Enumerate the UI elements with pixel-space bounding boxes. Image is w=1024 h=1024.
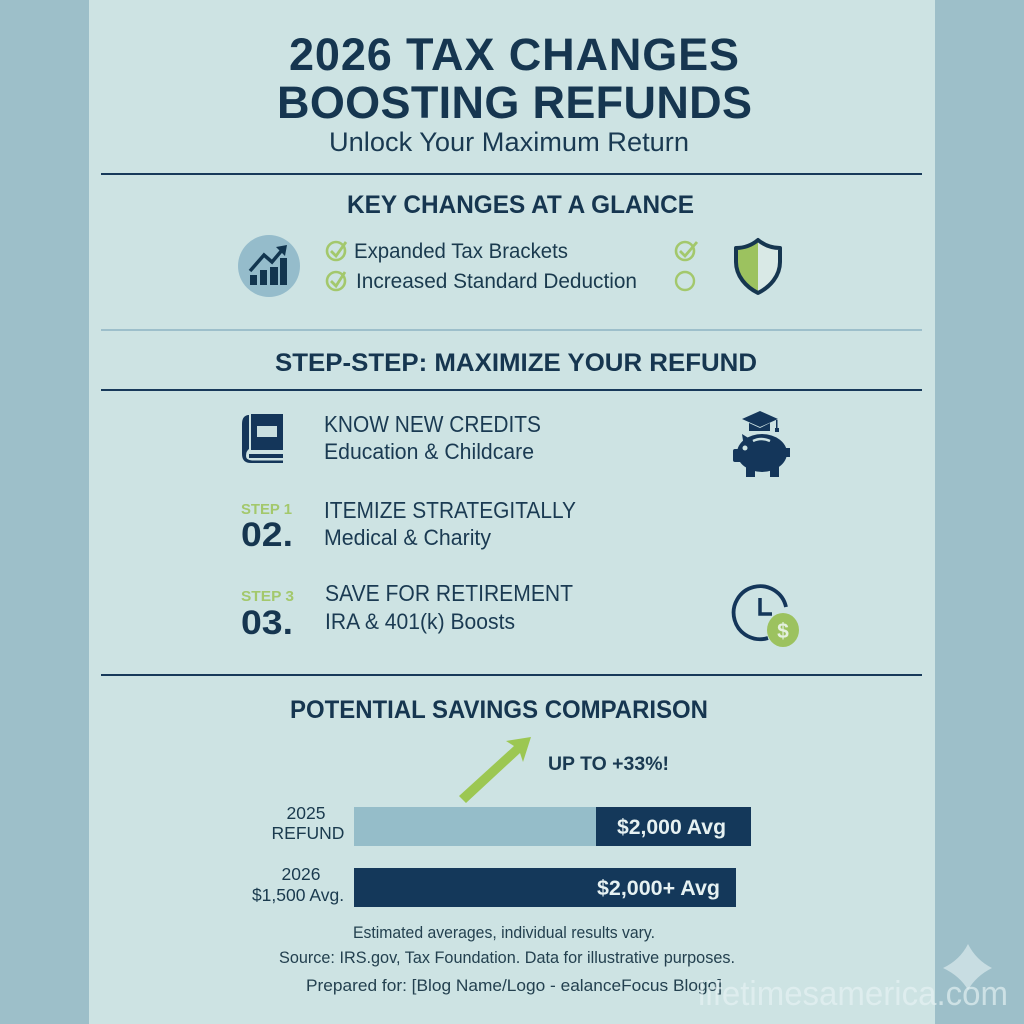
footnotes: Source: IRS.gov, Tax Foundation. Data for illustrative purposes.: [279, 948, 735, 967]
icon: piggy bank with cap: [733, 411, 790, 477]
label: 2025 refund: REFUND: [272, 823, 344, 843]
label: 2025 refund: 2025: [287, 803, 325, 823]
icon: check two: [327, 272, 345, 290]
bar: 2025: $2,000 Avg: [617, 816, 726, 839]
heading: step-step: STEP-STEP: MAXIMIZE YOUR REFUND: [275, 349, 757, 377]
text: expanded tax brackets: Expanded Tax Brackets: [354, 240, 568, 263]
text: increased standard deduction: Increased Standard Deduction: [356, 270, 637, 293]
text: itemize strategically: ITEMIZE STRATEGITALLY: [324, 497, 576, 523]
label: 2026: 2026: [282, 864, 320, 884]
panel: step three: [241, 580, 799, 647]
label: step 3: STEP 3: [241, 588, 294, 605]
icon: clock with dollar coin: [734, 586, 799, 647]
arrow: growth: [459, 737, 531, 803]
title: BOOSTING REFUNDS: [277, 77, 752, 128]
number: 02: 02.: [241, 516, 293, 554]
subtitle: Unlock Your Maximum Return: [329, 127, 689, 157]
panel: step two: [241, 497, 576, 554]
bar: 2026: $2,000+ Avg: [597, 877, 720, 900]
icon: check one: [327, 242, 346, 260]
label: 2026: $1,500 Avg.: [252, 885, 344, 905]
label: 2025 refund: [272, 803, 344, 843]
title: 2026 TAX CHANGES: [289, 29, 739, 80]
panel: key changes: [238, 191, 780, 297]
label: step 1: STEP 1: [241, 501, 292, 518]
number: 03: 03.: [241, 604, 293, 642]
panel: step one: [242, 411, 790, 477]
callout: up to 33 percent: UP TO +33%!: [548, 754, 669, 775]
text: save for retirement: SAVE FOR RETIREMENT: [325, 580, 573, 606]
icon: clock with dollar coin: $: [777, 620, 789, 643]
title: [277, 29, 752, 128]
heading: key changes: KEY CHANGES AT A GLANCE: [347, 191, 694, 219]
watermark: [698, 944, 1008, 1013]
panel: savings chart: [252, 737, 751, 907]
watermark: lifetimesamerica.com: [698, 975, 1008, 1013]
label: 2026: [252, 864, 344, 905]
text: education and childcare: Education & Childcare: [324, 439, 534, 464]
footnotes: Estimated averages, individual results vary.: [353, 923, 655, 942]
bar: 2025: [354, 807, 751, 846]
footnotes: [279, 923, 735, 995]
icon: growth chart: [238, 235, 300, 297]
heading: potential savings: POTENTIAL SAVINGS COMPARISON: [290, 696, 708, 724]
icon: shield: [736, 240, 780, 293]
footnotes: Prepared for: [Blog Name/Logo - ealanceFocus Blogo]: [306, 976, 722, 995]
text: know new credits: KNOW NEW CREDITS: [324, 411, 541, 437]
text: ira and 401k: IRA & 401(k) Boosts: [325, 609, 515, 634]
bar: 2026: [354, 868, 736, 907]
icon: empty circle: [676, 272, 694, 290]
icon: check three: [676, 242, 697, 260]
text: medical and charity: Medical & Charity: [324, 525, 491, 550]
icon: book: [242, 414, 283, 463]
